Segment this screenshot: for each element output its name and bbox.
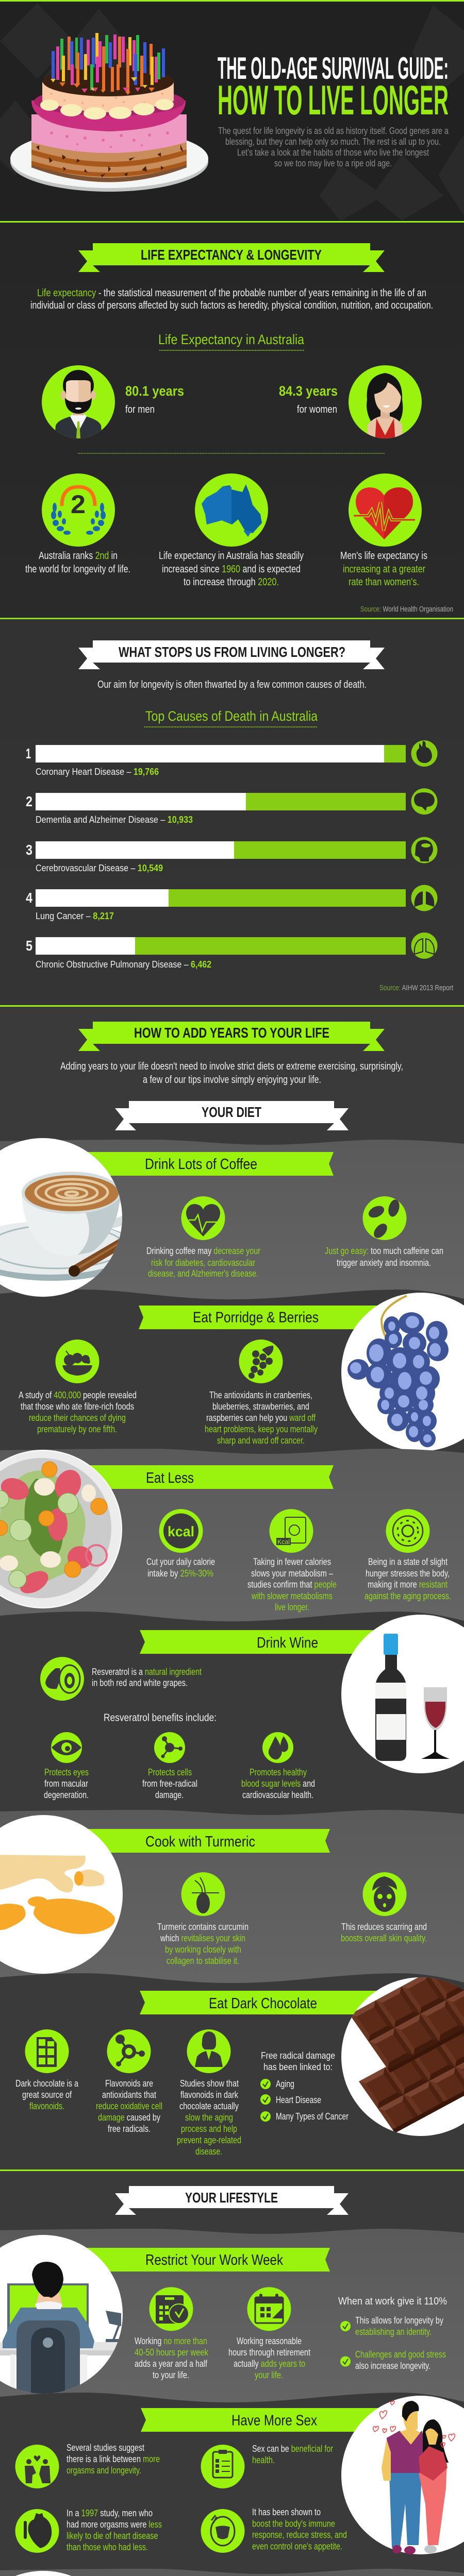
stat: men	[125, 383, 184, 415]
icon: man avatar	[42, 365, 115, 443]
text: 1997 study	[67, 2508, 162, 2552]
text: reasonable hours: hours through retirement	[228, 2347, 310, 2358]
text: studies show: slow the aging	[185, 2112, 233, 2123]
text: men's life expectancy: increasing at a greater	[343, 564, 425, 575]
text: studies show: prevent age-related	[177, 2135, 241, 2145]
bar 4	[26, 885, 437, 921]
illustration: coffee cup	[0, 1138, 122, 1297]
text: studies show: process and help	[181, 2124, 237, 2134]
text: cut calories	[146, 1557, 215, 1579]
text: decrease your risk: Drinking coffee may decrease your	[146, 1246, 260, 1256]
icon: calorie book: Kcal	[277, 1538, 290, 1546]
ribbon: Eat Porridge & Berries	[193, 1310, 319, 1326]
text: several studies: Several studies suggest	[67, 2443, 144, 2453]
bar 3: Cerebrovascular Disease – 10,549	[36, 863, 163, 873]
text: several studies	[67, 2443, 160, 2476]
text: protects cells: damage.	[155, 1790, 184, 1800]
text: decrease your risk	[146, 1246, 260, 1279]
text: flavonoids: antioxidants that	[102, 2090, 156, 2100]
illustration: chocolate bar	[341, 1977, 464, 2136]
text: blood sugar: cardiovascular health.	[242, 1790, 313, 1800]
text: reduces scarring	[341, 1922, 427, 1943]
text: curcumin: by working closely with	[165, 1944, 241, 1955]
text: curcumin: which revitalises your skin	[160, 1933, 245, 1943]
text: go easy: trigger anxiety and insomnia.	[337, 1258, 431, 1268]
stat: men: for men	[125, 404, 155, 415]
text: steadily increased: increased since 1960 and is expected	[162, 564, 301, 575]
icon: coffee beans	[363, 1196, 406, 1241]
ribbon: Restrict Your Work Week	[145, 2252, 283, 2268]
panel: have more sex	[15, 2396, 464, 2554]
heading banner: your lifestyle: YOUR LIFESTYLE	[185, 2190, 278, 2206]
text: dark chocolate: great source of	[22, 2090, 72, 2100]
heading banner: life expectancy: LIFE EXPECTANCY & LONGEVITY	[141, 247, 322, 263]
text: blood sugar	[241, 1767, 315, 1800]
checklist: free radical damage	[260, 2050, 349, 2122]
text: men's life expectancy: Men's life expectancy is	[340, 550, 427, 562]
heading banner: life expectancy	[78, 243, 385, 272]
bar 4: Lung Cancer – 8,217	[36, 911, 114, 921]
text: aim for longevity: Our aim for longevity is often thwarted by a few common causes of death.	[97, 679, 367, 690]
ribbon	[139, 1306, 402, 1329]
icon: hair follicle	[181, 1872, 225, 1916]
icon: woman avatar	[349, 365, 422, 443]
text: antioxidants	[205, 1390, 318, 1446]
panel: dark chocolate	[16, 1977, 464, 2155]
ribbon	[140, 1991, 402, 2014]
icon: calorie book	[269, 1509, 313, 1553]
text: blood sugar: blood sugar levels and	[241, 1778, 315, 1789]
text: resveratrol: in both red and white grapes.	[92, 1677, 188, 1688]
intro text: so we too may live to a ripe old age.	[274, 158, 392, 168]
text: go easy: Just go easy: too much caffeine can	[325, 1246, 443, 1256]
bar 2: Dementia and Alzheimer Disease – 10,933	[36, 815, 193, 825]
text: protects cells	[142, 1767, 197, 1800]
stat: women	[279, 383, 338, 415]
text: antioxidants: blueberries, strawberries, and	[212, 1401, 309, 1412]
text: reduces scarring: boosts overall skin quality.	[341, 1933, 427, 1943]
text: study of 400,000: that those who ate fibre-rich foods	[21, 1401, 134, 1412]
ribbon	[77, 2248, 330, 2272]
text: reduces scarring: This reduces scarring and	[341, 1922, 427, 1932]
text: study of 400,000: A study of 400,000 people revealed	[19, 1390, 137, 1400]
ribbon	[77, 1152, 334, 1176]
text: cut calories: Cut your daily calorie	[146, 1557, 215, 1567]
heading banner: how to add years	[78, 1022, 385, 1051]
ribbon	[77, 1829, 330, 1853]
text: ranks 2nd: Australia ranks 2nd in	[39, 550, 118, 562]
panel: exercise	[0, 2569, 464, 2576]
bar 2: 2	[26, 793, 32, 809]
text: flavonoids: reduce oxidative cell	[96, 2101, 162, 2111]
text: beneficial: Sex can be beneficial for	[252, 2444, 333, 2454]
panel: eat less	[0, 1449, 464, 1621]
stat: men: 80.1 years	[125, 383, 184, 399]
bar 4: 4	[26, 890, 32, 906]
checklist: give it 110%: This allows for longevity by	[355, 2315, 443, 2326]
bar 5	[26, 933, 437, 970]
text: study of 400,000	[19, 1390, 137, 1434]
icon: calendar	[247, 2287, 291, 2331]
heading: life expectancy in Australia: Life Expectancy in Australia	[158, 332, 305, 347]
illustration: elderly runners	[0, 2571, 123, 2576]
text: protects cells: Protects cells	[148, 1767, 192, 1777]
text: reasonable hours: your life.	[255, 2370, 283, 2380]
icon: drops	[262, 1732, 293, 1763]
text: study of 400,000: prematurely by one fifth.	[37, 1424, 117, 1434]
text: beneficial	[252, 2444, 333, 2465]
text: 1997 study: than those who had less.	[67, 2542, 148, 2552]
icon: Australia map	[195, 473, 268, 547]
text: beneficial: health.	[252, 2455, 275, 2465]
panel: porridge and berries	[19, 1293, 464, 1451]
checklist: free radical damage: has been linked to:	[263, 2062, 333, 2072]
checklist: free radical damage: Aging	[276, 2079, 294, 2089]
text: curcumin	[157, 1922, 248, 1966]
text: fewer calories: with slower metabolisms	[251, 1591, 333, 1601]
heading banner: your diet: YOUR DIET	[202, 1104, 261, 1120]
text: men's life expectancy	[340, 550, 427, 588]
title	[218, 51, 449, 124]
text: studies show	[177, 2078, 241, 2157]
text: antioxidants: sharp and ward off cancer.	[217, 1435, 305, 1446]
bar chart: top causes of death	[26, 740, 437, 970]
heading banner: what stops us: WHAT STOPS US FROM LIVING LONGER?	[119, 644, 345, 660]
icon: ranked 2nd laurel	[42, 473, 115, 547]
icon: heart organ	[15, 2509, 59, 2553]
text: studies show: Studies show that	[180, 2078, 239, 2089]
ribbon	[141, 2408, 402, 2432]
text: slight hunger: making it more resistant	[368, 1580, 448, 1590]
text: 40-50 hours	[135, 2336, 209, 2380]
text: antioxidants: raspberries can help you ward off	[206, 1413, 316, 1423]
heading: top causes: Top Causes of Death in Australia	[145, 708, 318, 724]
text: 1997 study: In a 1997 study, men who	[67, 2508, 153, 2518]
panel: drink coffee	[0, 1138, 464, 1299]
illustration: turmeric root	[0, 1815, 123, 1974]
text: go easy	[325, 1246, 443, 1268]
ribbon: Eat Less	[146, 1470, 194, 1486]
text: fewer calories: Taking in fewer calories	[253, 1557, 331, 1567]
icon: donut	[386, 1509, 430, 1553]
text: antioxidants: heart problems, keep you mentally	[205, 1424, 318, 1434]
text: slight hunger	[364, 1557, 451, 1601]
checklist: give it 110%	[338, 2296, 447, 2371]
icon: stress head	[201, 2509, 244, 2553]
icon: clipboard	[201, 2445, 244, 2488]
text: protects cells: from free-radical	[142, 1778, 197, 1789]
text: ranks 2nd: the world for longevity of life.	[25, 564, 130, 575]
text: shown to: boost the body's immune	[252, 2518, 335, 2529]
checklist: give it 110%: When at work give it 110%	[338, 2296, 447, 2307]
icon: heart	[181, 1196, 225, 1240]
text: protects eyes	[44, 1767, 89, 1800]
text: protects eyes: from macular	[44, 1778, 88, 1789]
icon: ranked 2nd laurel: 2	[71, 490, 86, 519]
text: shown to: even control one's appetite.	[252, 2541, 342, 2551]
text: steadily increased: to increase through 2020.	[184, 577, 279, 588]
text: blood sugar: Promotes healthy	[250, 1767, 307, 1777]
text: dark chocolate: flavonoids.	[29, 2101, 64, 2111]
checklist: free radical damage: Heart Disease	[276, 2095, 321, 2105]
text: adding years: a few of our tips involve simply enjoying your life.	[143, 1074, 321, 1086]
icon: face mask	[363, 1872, 406, 1916]
text: protects eyes: Protects eyes	[44, 1767, 89, 1777]
icon: flavonoid molecule	[107, 2029, 151, 2073]
ribbon: Drink Wine	[257, 1635, 318, 1651]
text block: definition	[30, 287, 433, 311]
icon: couple	[15, 2445, 59, 2488]
text: men's life expectancy: rate than women's.	[349, 577, 419, 588]
bar 1	[26, 740, 437, 777]
text: flavonoids: damage caused by	[98, 2112, 160, 2123]
text: reasonable hours: actually adds years to	[234, 2359, 305, 2369]
stat: women: for women	[297, 404, 337, 415]
text: decrease your risk: risk for diabetes, cardiovascular	[151, 1258, 255, 1268]
text: studies show: disease.	[195, 2146, 222, 2157]
illustration: wine bottle and glass	[341, 1615, 464, 1773]
text: fewer calories: live longer.	[275, 1602, 309, 1613]
icon: cells	[154, 1732, 185, 1763]
text: decrease your risk: disease, and Alzheimer's disease.	[148, 1268, 258, 1279]
bar 5: Chronic Obstructive Pulmonary Disease – 6,462	[36, 959, 211, 970]
text: protects eyes: degeneration.	[44, 1790, 89, 1800]
text: dark chocolate	[15, 2078, 79, 2111]
text: adding years	[60, 1061, 403, 1086]
checklist: give it 110%: also increase longevity.	[355, 2361, 430, 2371]
ribbon: Have More Sex	[231, 2412, 317, 2429]
text: resveratrol: Resveratrol is a natural ingredient	[92, 1667, 202, 1677]
text: 40-50 hours: Working no more than	[135, 2336, 207, 2346]
text: fewer calories	[247, 1557, 337, 1613]
text: shown to: It has been shown to	[252, 2507, 321, 2517]
text: curcumin: Turmeric contains curcumin	[157, 1922, 248, 1932]
panel: turmeric	[0, 1810, 464, 1983]
text: steadily increased	[159, 550, 304, 588]
hero: birthday cake illustration	[10, 33, 208, 192]
text: fewer calories: studies confirm that people	[247, 1580, 337, 1590]
text: 40-50 hours: to your life.	[153, 2370, 189, 2380]
text: several studies: there is a link between more	[67, 2454, 160, 2464]
icon: woman silhouette	[187, 2029, 231, 2073]
panel: restrict work week	[0, 2229, 464, 2402]
ribbon	[77, 1465, 334, 1489]
heading banner: what stops us	[78, 640, 385, 669]
text: cut calories: intake by 25%-30%	[147, 1568, 213, 1579]
ribbon: Drink Lots of Coffee	[145, 1156, 257, 1173]
text: 1997 study: had more orgasms were less	[67, 2519, 162, 2530]
illustration: grapes	[341, 1293, 464, 1451]
panel: drink wine	[40, 1615, 464, 1800]
text: study of 400,000: reduce their chances of dying	[29, 1413, 126, 1423]
text: resveratrol	[92, 1667, 202, 1688]
text: shown to	[252, 2507, 347, 2551]
checklist: free radical damage: Free radical damage	[261, 2050, 335, 2061]
text: flavonoids	[96, 2078, 162, 2134]
icon: kcal: kcal	[168, 1523, 194, 1539]
text: reasonable hours: Working reasonable	[237, 2336, 302, 2346]
illustration: office worker	[0, 2235, 123, 2401]
stat: women: 84.3 years	[279, 383, 338, 399]
text: 1997 study: likely to die of heart disease	[67, 2531, 158, 2541]
icon: grapes	[239, 1340, 283, 1383]
ribbon	[140, 1630, 402, 1654]
intro text	[218, 126, 449, 168]
icon: heart pulse	[349, 473, 422, 547]
bar 1: 1	[26, 745, 31, 761]
ribbon: Cook with Turmeric	[145, 1834, 255, 1850]
checklist: free radical damage: Many Types of Cancer	[276, 2111, 349, 2122]
text: ranks 2nd	[25, 550, 130, 575]
illustration: salad plate	[0, 1450, 122, 1608]
text: slight hunger: Being in a state of slight	[368, 1557, 448, 1567]
text: flavonoids: Flavonoids are	[105, 2078, 153, 2089]
text: studies show: chocolate actually	[179, 2101, 239, 2111]
icon: fruit bowl	[56, 1340, 99, 1383]
text: 40-50 hours: adds a year and a half	[135, 2359, 208, 2369]
heading banner: your diet	[115, 1101, 349, 1130]
checklist: give it 110%: establishing an identity.	[355, 2327, 432, 2337]
bar 1: Coronary Heart Disease – 19,766	[36, 767, 159, 777]
heading banner: how to add years: HOW TO ADD YEARS TO YOUR LIFE	[134, 1025, 329, 1041]
text: curcumin: collagen to stabilise it.	[167, 1956, 239, 1966]
bar 5: 5	[26, 938, 32, 954]
bar 2	[26, 788, 437, 825]
bar 3	[26, 837, 437, 873]
icon: eye	[51, 1732, 82, 1763]
ribbon: Eat Dark Chocolate	[209, 1995, 317, 2012]
illustration: couple	[341, 2396, 464, 2554]
text: several studies: orgasms and longevity.	[67, 2465, 141, 2476]
text: fewer calories: slows your metabolism –	[251, 1568, 333, 1579]
text: benefits include: Resveratrol benefits include:	[104, 1713, 217, 1724]
text: 40-50 hours: 40-50 hours per week	[135, 2347, 209, 2358]
text: steadily increased: Life expectancy in Australia has steadily	[159, 550, 304, 562]
icon: calendar clock	[150, 2287, 193, 2331]
icon: kcal	[159, 1509, 203, 1553]
heading banner: your lifestyle	[115, 2186, 349, 2215]
bar 3: 3	[26, 842, 32, 858]
text: dark chocolate: Dark chocolate is a	[15, 2078, 79, 2089]
text: reasonable hours	[228, 2336, 310, 2380]
text: antioxidants: The antioxidants in cranberries,	[209, 1390, 312, 1400]
text: studies show: flavonoids in dark	[180, 2090, 239, 2100]
text: flavonoids: free radicals.	[108, 2124, 151, 2134]
text: shown to: response, reduce stress, and	[252, 2530, 347, 2540]
icon: resveratrol avocado	[40, 1657, 84, 1701]
icon: chocolate bar	[25, 2029, 69, 2073]
